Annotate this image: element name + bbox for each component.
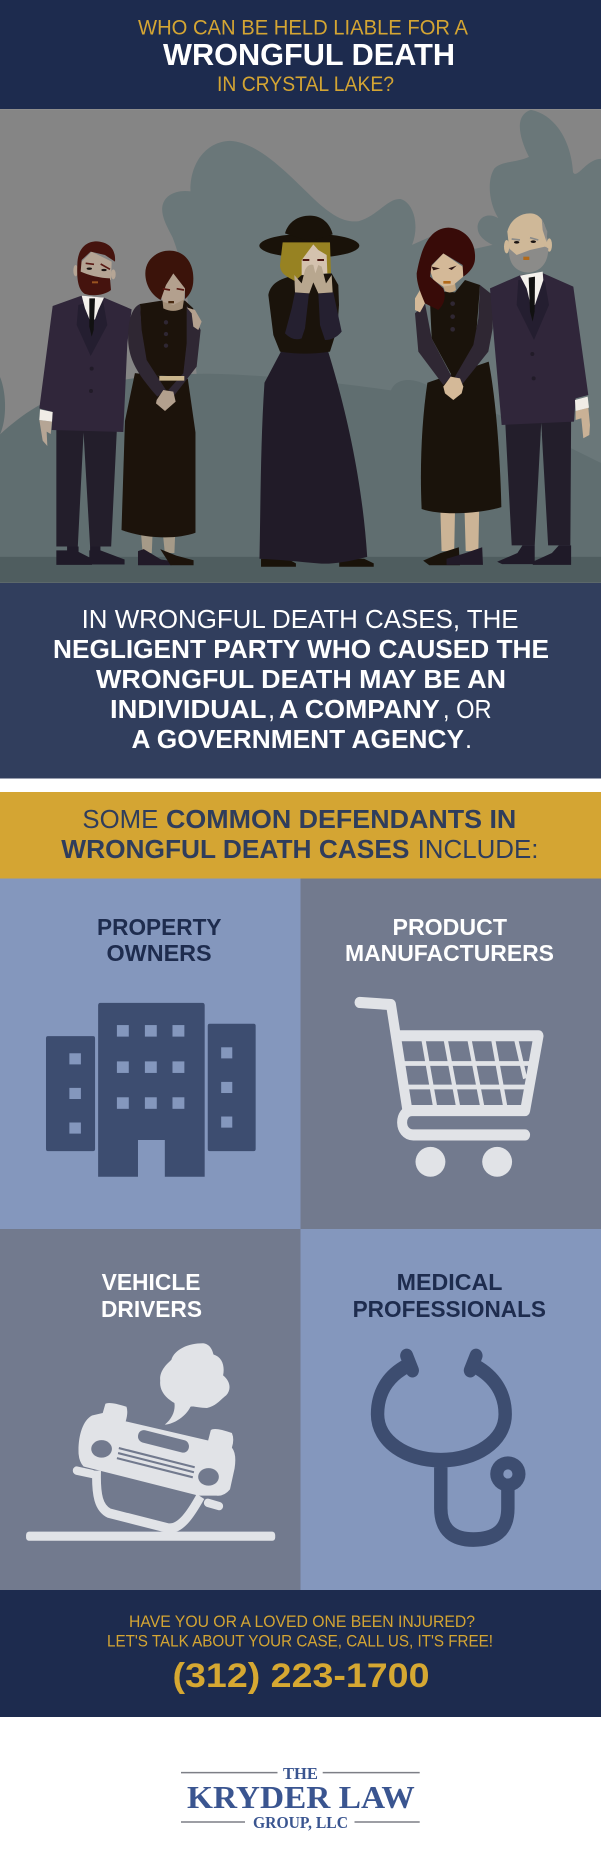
- heading text: COMMON DEFENDANTS IN: [166, 806, 516, 834]
- heading text: INCLUDE:: [418, 836, 538, 864]
- statement text: ,: [268, 696, 275, 724]
- figure: woman with short hair: [122, 251, 202, 565]
- figure: woman with long dark hair: [415, 228, 501, 565]
- statement text: WRONGFUL DEATH MAY BE AN: [96, 666, 506, 694]
- label: property owners: [97, 914, 222, 966]
- title main: WRONGFUL DEATH: [163, 38, 455, 72]
- heading text: SOME: [82, 806, 158, 834]
- label: product manufacturers: PRODUCT: [392, 914, 507, 940]
- label: product manufacturers: MANUFACTURERS: [345, 940, 554, 966]
- panel: common defendants heading: [0, 792, 601, 878]
- icon: overturned car with smoke: [26, 1343, 275, 1541]
- heading text: WRONGFUL DEATH CASES: [61, 836, 409, 864]
- logo: The Kryder Law Group, LLC: KRYDER LAW: [187, 1779, 415, 1815]
- statement text: .: [465, 726, 472, 754]
- illustration: mourners at a funeral: [0, 109, 601, 583]
- icon: stethoscope: [378, 1356, 526, 1540]
- panel: call to action: [0, 1590, 601, 1717]
- panel: negligent party statement: [0, 583, 601, 778]
- label: vehicle drivers: [101, 1269, 202, 1322]
- label: medical professionals: PROFESSIONALS: [353, 1296, 546, 1322]
- panel: title header: [0, 0, 601, 109]
- logo: The Kryder Law Group, LLC: [181, 1764, 420, 1832]
- figure: crying woman in hat: [259, 216, 374, 567]
- panel: product manufacturers: [300, 878, 601, 1230]
- title line 1: WHO CAN BE HELD LIABLE FOR A: [138, 16, 469, 40]
- title line 3: IN CRYSTAL LAKE?: [217, 72, 394, 96]
- call to action text: HAVE YOU OR A LOVED ONE BEEN INJURED?: [129, 1612, 475, 1631]
- label: vehicle drivers: DRIVERS: [101, 1296, 202, 1322]
- panel: vehicle drivers: [0, 1229, 300, 1590]
- statement text: , OR: [443, 696, 492, 724]
- logo: The Kryder Law Group, LLC: THE: [283, 1764, 318, 1783]
- icon: shopping cart: [360, 1002, 539, 1177]
- statement text: INDIVIDUAL: [110, 696, 266, 724]
- statement text: A GOVERNMENT AGENCY: [132, 726, 464, 754]
- figure: bearded man: [39, 241, 132, 565]
- label: property owners: PROPERTY: [97, 914, 222, 940]
- statement text: IN WRONGFUL DEATH CASES, THE: [82, 606, 519, 634]
- label: vehicle drivers: VEHICLE: [102, 1269, 200, 1295]
- label: property owners: OWNERS: [106, 940, 212, 966]
- heading text: [61, 806, 539, 864]
- statement text: A COMPANY: [279, 696, 440, 724]
- figure: bald older man: [490, 213, 590, 565]
- statement text: [53, 606, 549, 754]
- panel: medical professionals: [300, 1229, 601, 1590]
- call to action text line 2: LET'S TALK ABOUT YOUR CASE, CALL US, IT'S FREE!: [107, 1632, 493, 1650]
- icon: office buildings: [46, 1003, 256, 1177]
- label: medical professionals: MEDICAL: [397, 1269, 503, 1295]
- label: medical professionals: [353, 1269, 546, 1322]
- logo: The Kryder Law Group, LLC: GROUP, LLC: [253, 1813, 348, 1832]
- phone number: (312) 223-1700: [172, 1657, 430, 1695]
- statement text: NEGLIGENT PARTY WHO CAUSED THE: [53, 636, 549, 664]
- label: product manufacturers: [345, 914, 554, 966]
- panel: property owners: [0, 878, 300, 1230]
